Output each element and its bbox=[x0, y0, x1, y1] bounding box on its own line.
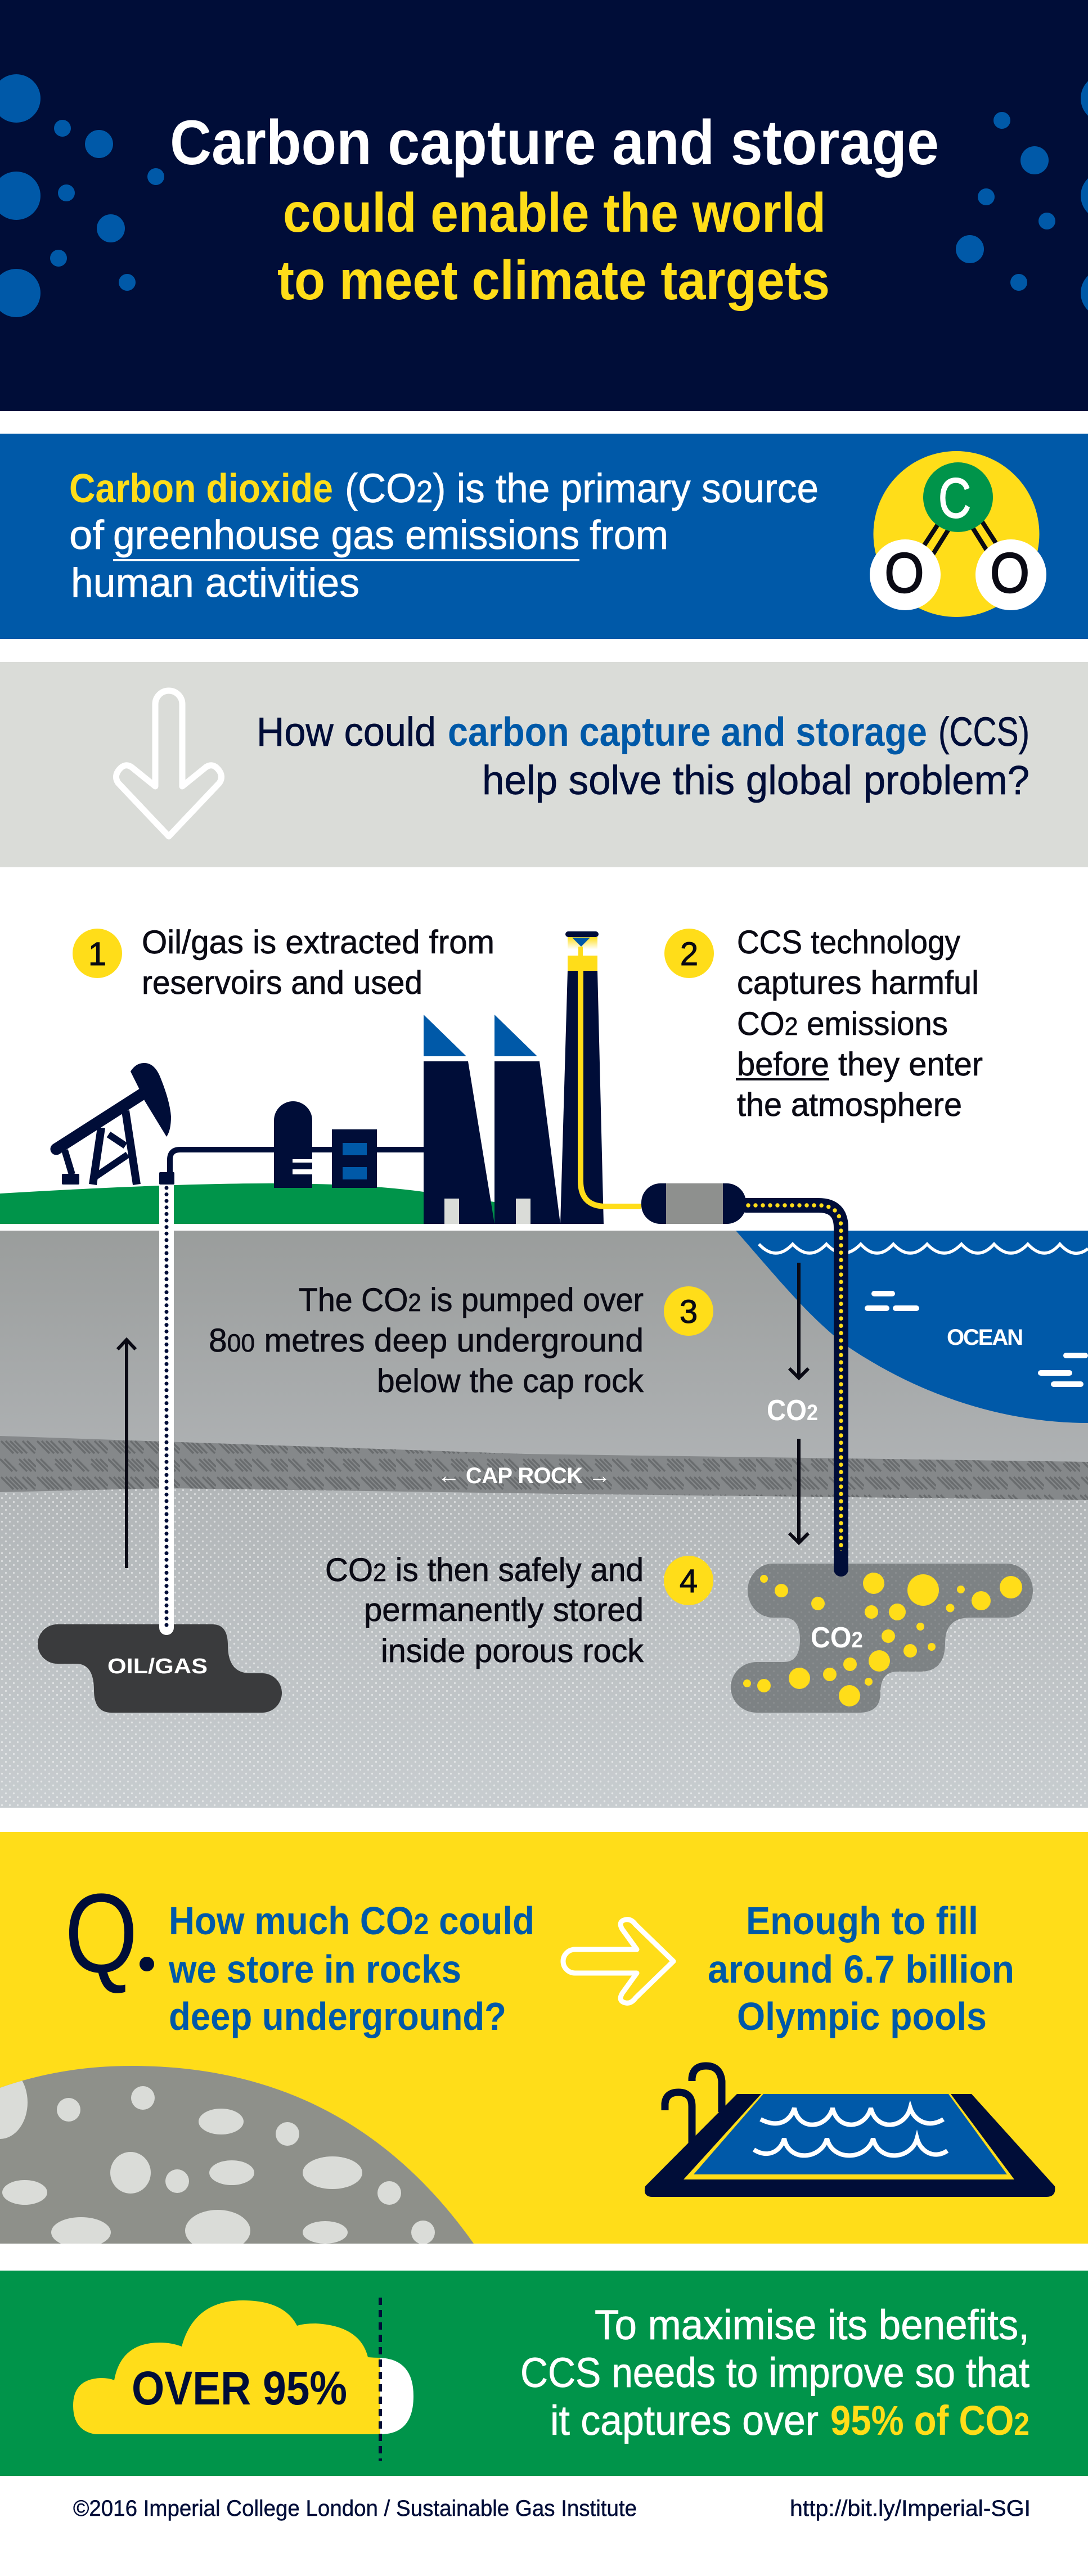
arrow: down, CO2 to storage bbox=[789, 1439, 808, 1543]
icon: CO2 molecule: O bbox=[884, 542, 924, 605]
icon: separator tank bbox=[274, 1101, 312, 1188]
icon: cloud 95 percent bbox=[73, 2298, 413, 2461]
pipe: captured CO2 bbox=[581, 971, 641, 1206]
text: answer: around 6.7 billion bbox=[708, 1947, 1014, 1991]
text: answer: Olympic pools bbox=[737, 1994, 987, 2038]
step 2: CCS technology bbox=[737, 924, 960, 961]
arrow: down, CO2 to cap rock bbox=[789, 1263, 808, 1378]
text: question bbox=[168, 1899, 534, 2038]
step 2: 2 bbox=[680, 936, 698, 972]
icon: cloud 95 percent: OVER 95% bbox=[132, 2362, 347, 2415]
text: question: deep underground? bbox=[169, 1994, 506, 2038]
icon: compressor bbox=[641, 1183, 746, 1224]
text: carbon dioxide statement: from bbox=[590, 513, 668, 558]
ocean: OCEAN bbox=[947, 1325, 1023, 1350]
panel: capture target bbox=[0, 2271, 1088, 2476]
text: CCS question bbox=[257, 710, 1029, 803]
step 4 bbox=[325, 1552, 713, 1669]
step 3: The CO2 is pumped over bbox=[299, 1282, 644, 1318]
step 3: 3 bbox=[680, 1294, 698, 1330]
label: CO2: CO2 bbox=[767, 1394, 818, 1427]
decorative bubbles bbox=[0, 74, 1088, 317]
arrow: up, oil extraction bbox=[118, 1340, 136, 1568]
panel: CCS question bbox=[0, 662, 1088, 867]
text: CCS question: (CCS) bbox=[938, 710, 1029, 755]
footer: ©2016 Imperial College London / Sustainable Gas Institute bbox=[73, 2496, 637, 2521]
text: conclusion: CCS needs to improve so that bbox=[520, 2349, 1029, 2396]
text: CCS question: carbon capture and storage bbox=[448, 710, 927, 755]
text: carbon dioxide statement bbox=[69, 466, 819, 606]
step 3: below the cap rock bbox=[377, 1363, 644, 1399]
text: answer: Enough to fill bbox=[746, 1899, 978, 1943]
ocean bbox=[736, 1231, 1088, 1423]
step 2: CO2 emissions bbox=[737, 1006, 948, 1042]
pipe: production well bbox=[159, 1172, 174, 1631]
label: Q: . bbox=[139, 1916, 155, 1979]
porous rock layer bbox=[0, 1485, 1088, 1808]
step 1: reservoirs and used bbox=[142, 965, 422, 1001]
step 1: 1 bbox=[88, 936, 106, 972]
icon: swimming pool bbox=[645, 2066, 1055, 2197]
step 2 bbox=[664, 924, 983, 1123]
step 2: captures harmful bbox=[737, 965, 979, 1001]
ground: green hill bbox=[0, 1183, 506, 1224]
icon: CO2 molecule: O bbox=[990, 542, 1029, 605]
panel: storage capacity bbox=[0, 1832, 1088, 2251]
icon: capture stack bbox=[560, 931, 604, 1224]
icon: CO2 molecule bbox=[870, 451, 1046, 617]
step 1 bbox=[73, 924, 494, 1001]
step 2: the atmosphere bbox=[737, 1087, 962, 1123]
pipe: injection well bbox=[746, 1205, 841, 1569]
upper rock layer bbox=[0, 1231, 1088, 1467]
icon: CO2 molecule: C bbox=[938, 467, 971, 530]
text: CCS question: How could bbox=[257, 710, 436, 755]
icon: pump jack bbox=[56, 1063, 171, 1185]
step 1: Oil/gas is extracted from bbox=[142, 924, 494, 961]
text: question: we store in rocks bbox=[168, 1947, 461, 1991]
arrow: down bbox=[116, 691, 222, 836]
reservoir: stored CO2: CO2 bbox=[811, 1622, 863, 1654]
text: conclusion: it captures over bbox=[550, 2397, 819, 2444]
icon: power plant towers bbox=[424, 1015, 560, 1224]
title: to meet climate targets bbox=[277, 249, 830, 311]
label: Q: Q bbox=[65, 1871, 138, 1996]
reservoir: oil/gas: OIL/GAS bbox=[107, 1655, 208, 1678]
text: carbon dioxide statement: (CO2) is the primary source bbox=[345, 466, 819, 511]
pipe: oil well to plant bbox=[170, 1150, 428, 1172]
text: answer bbox=[708, 1899, 1014, 2038]
step 3: 800 metres deep underground bbox=[209, 1322, 644, 1359]
text: question: How much CO2 could bbox=[169, 1899, 534, 1943]
text: carbon dioxide statement: Carbon dioxide bbox=[69, 466, 333, 511]
cap rock layer bbox=[0, 1436, 1088, 1500]
text: carbon dioxide statement: human activities bbox=[71, 561, 359, 606]
text: conclusion: To maximise its benefits, bbox=[595, 2302, 1029, 2348]
label: cap rock: ← CAP ROCK → bbox=[438, 1463, 611, 1488]
footer: http://bit.ly/Imperial-SGI bbox=[790, 2496, 1031, 2521]
arrow: right bbox=[563, 1920, 673, 2003]
text: conclusion bbox=[520, 2302, 1029, 2444]
text: carbon dioxide statement: greenhouse gas emissions bbox=[113, 513, 579, 558]
text: conclusion: 95% of CO2 bbox=[830, 2397, 1029, 2444]
panel: CCS process diagram bbox=[0, 924, 1088, 1808]
text: CCS question: help solve this global problem? bbox=[482, 758, 1029, 803]
title: Carbon capture and storage bbox=[170, 107, 939, 178]
step 4: CO2 is then safely and bbox=[325, 1552, 644, 1588]
step 2: before they enter bbox=[737, 1046, 983, 1083]
footer bbox=[73, 2496, 1031, 2521]
text: carbon dioxide statement: of bbox=[69, 513, 105, 558]
step 4: inside porous rock bbox=[381, 1633, 644, 1669]
reservoir: stored CO2 bbox=[731, 1558, 1033, 1713]
illustration: porous rock dome bbox=[0, 2066, 474, 2251]
step 4: 4 bbox=[680, 1563, 698, 1600]
panel: header bbox=[0, 0, 1088, 411]
icon: process unit bbox=[332, 1129, 377, 1188]
title: could enable the world bbox=[283, 182, 826, 244]
step 4: permanently stored bbox=[364, 1592, 644, 1628]
reservoir: oil/gas bbox=[38, 1624, 282, 1713]
panel: carbon dioxide bbox=[0, 434, 1088, 639]
title bbox=[170, 107, 939, 311]
step 3 bbox=[209, 1282, 713, 1399]
